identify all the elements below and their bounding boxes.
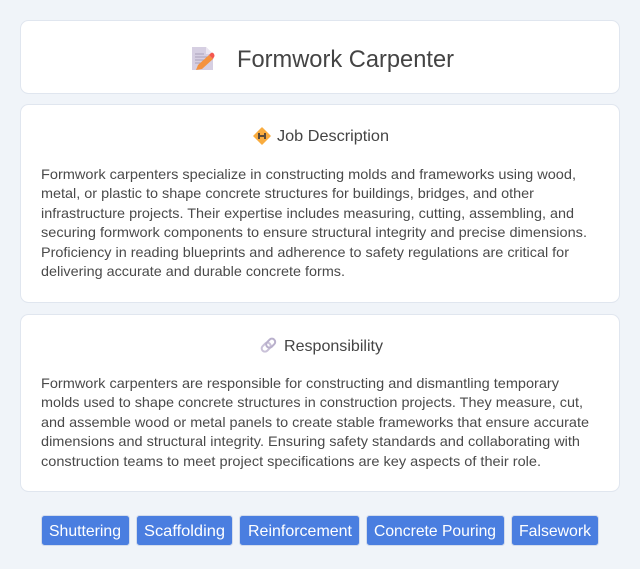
heading: job description: Job Description	[277, 128, 389, 145]
icon: document with pencil	[192, 47, 214, 70]
panel: job description	[20, 104, 620, 302]
text block: job description: metal, or plastic to shape concrete structures for buildings, bridges, and other	[41, 185, 534, 201]
icon: chain link	[260, 337, 277, 353]
text block: responsibility	[41, 375, 589, 469]
tag: Reinforcement: Reinforcement	[248, 523, 353, 540]
panel: responsibility	[20, 314, 620, 492]
heading: responsibility: Responsibility	[284, 338, 383, 355]
tag: Scaffolding	[136, 516, 232, 546]
text block: responsibility: construction teams to meet project specifications are key aspects of their role.	[41, 453, 541, 469]
tag: Shuttering: Shuttering	[49, 523, 121, 540]
text block: responsibility: and assemble wood or metal panels to create stable frameworks that ensure accurate	[41, 414, 589, 430]
text block: responsibility: molds used to shape concrete structures in construction projects. They measure, cut,	[41, 394, 583, 410]
icon: warning diamond	[254, 128, 270, 144]
tag: Scaffolding: Scaffolding	[144, 523, 225, 540]
text block: job description: Formwork carpenters specialize in constructing molds and frameworks using wood,	[41, 166, 576, 182]
text block: job description: infrastructure projects. Their expertise includes measuring, cutting, assembling, and	[41, 205, 574, 221]
tag: Falsework	[512, 516, 598, 546]
tag: Concrete Pouring: Concrete Pouring	[374, 523, 496, 540]
text block: responsibility: Formwork carpenters are responsible for constructing and dismantling temporary	[41, 375, 559, 391]
tag: Shuttering	[42, 516, 130, 546]
text block: job description	[41, 166, 587, 279]
text block: responsibility: dimensions and structural integrity. Ensuring safety standards and collaborating with	[41, 433, 580, 449]
tags row	[42, 516, 598, 546]
text block: job description: securing formwork components to ensure structural integrity and precise dimensions.	[41, 224, 587, 240]
title: Formwork Carpenter	[237, 46, 454, 73]
tag: Falsework: Falsework	[519, 523, 592, 540]
text block: job description: Proficiency in reading blueprints and adherence to safety regulations are critical for	[41, 244, 569, 260]
panel: title header	[20, 20, 620, 94]
text block: job description: delivering accurate and durable concrete forms.	[41, 263, 345, 279]
tag: Reinforcement	[240, 516, 360, 546]
tag: Concrete Pouring	[366, 516, 504, 546]
